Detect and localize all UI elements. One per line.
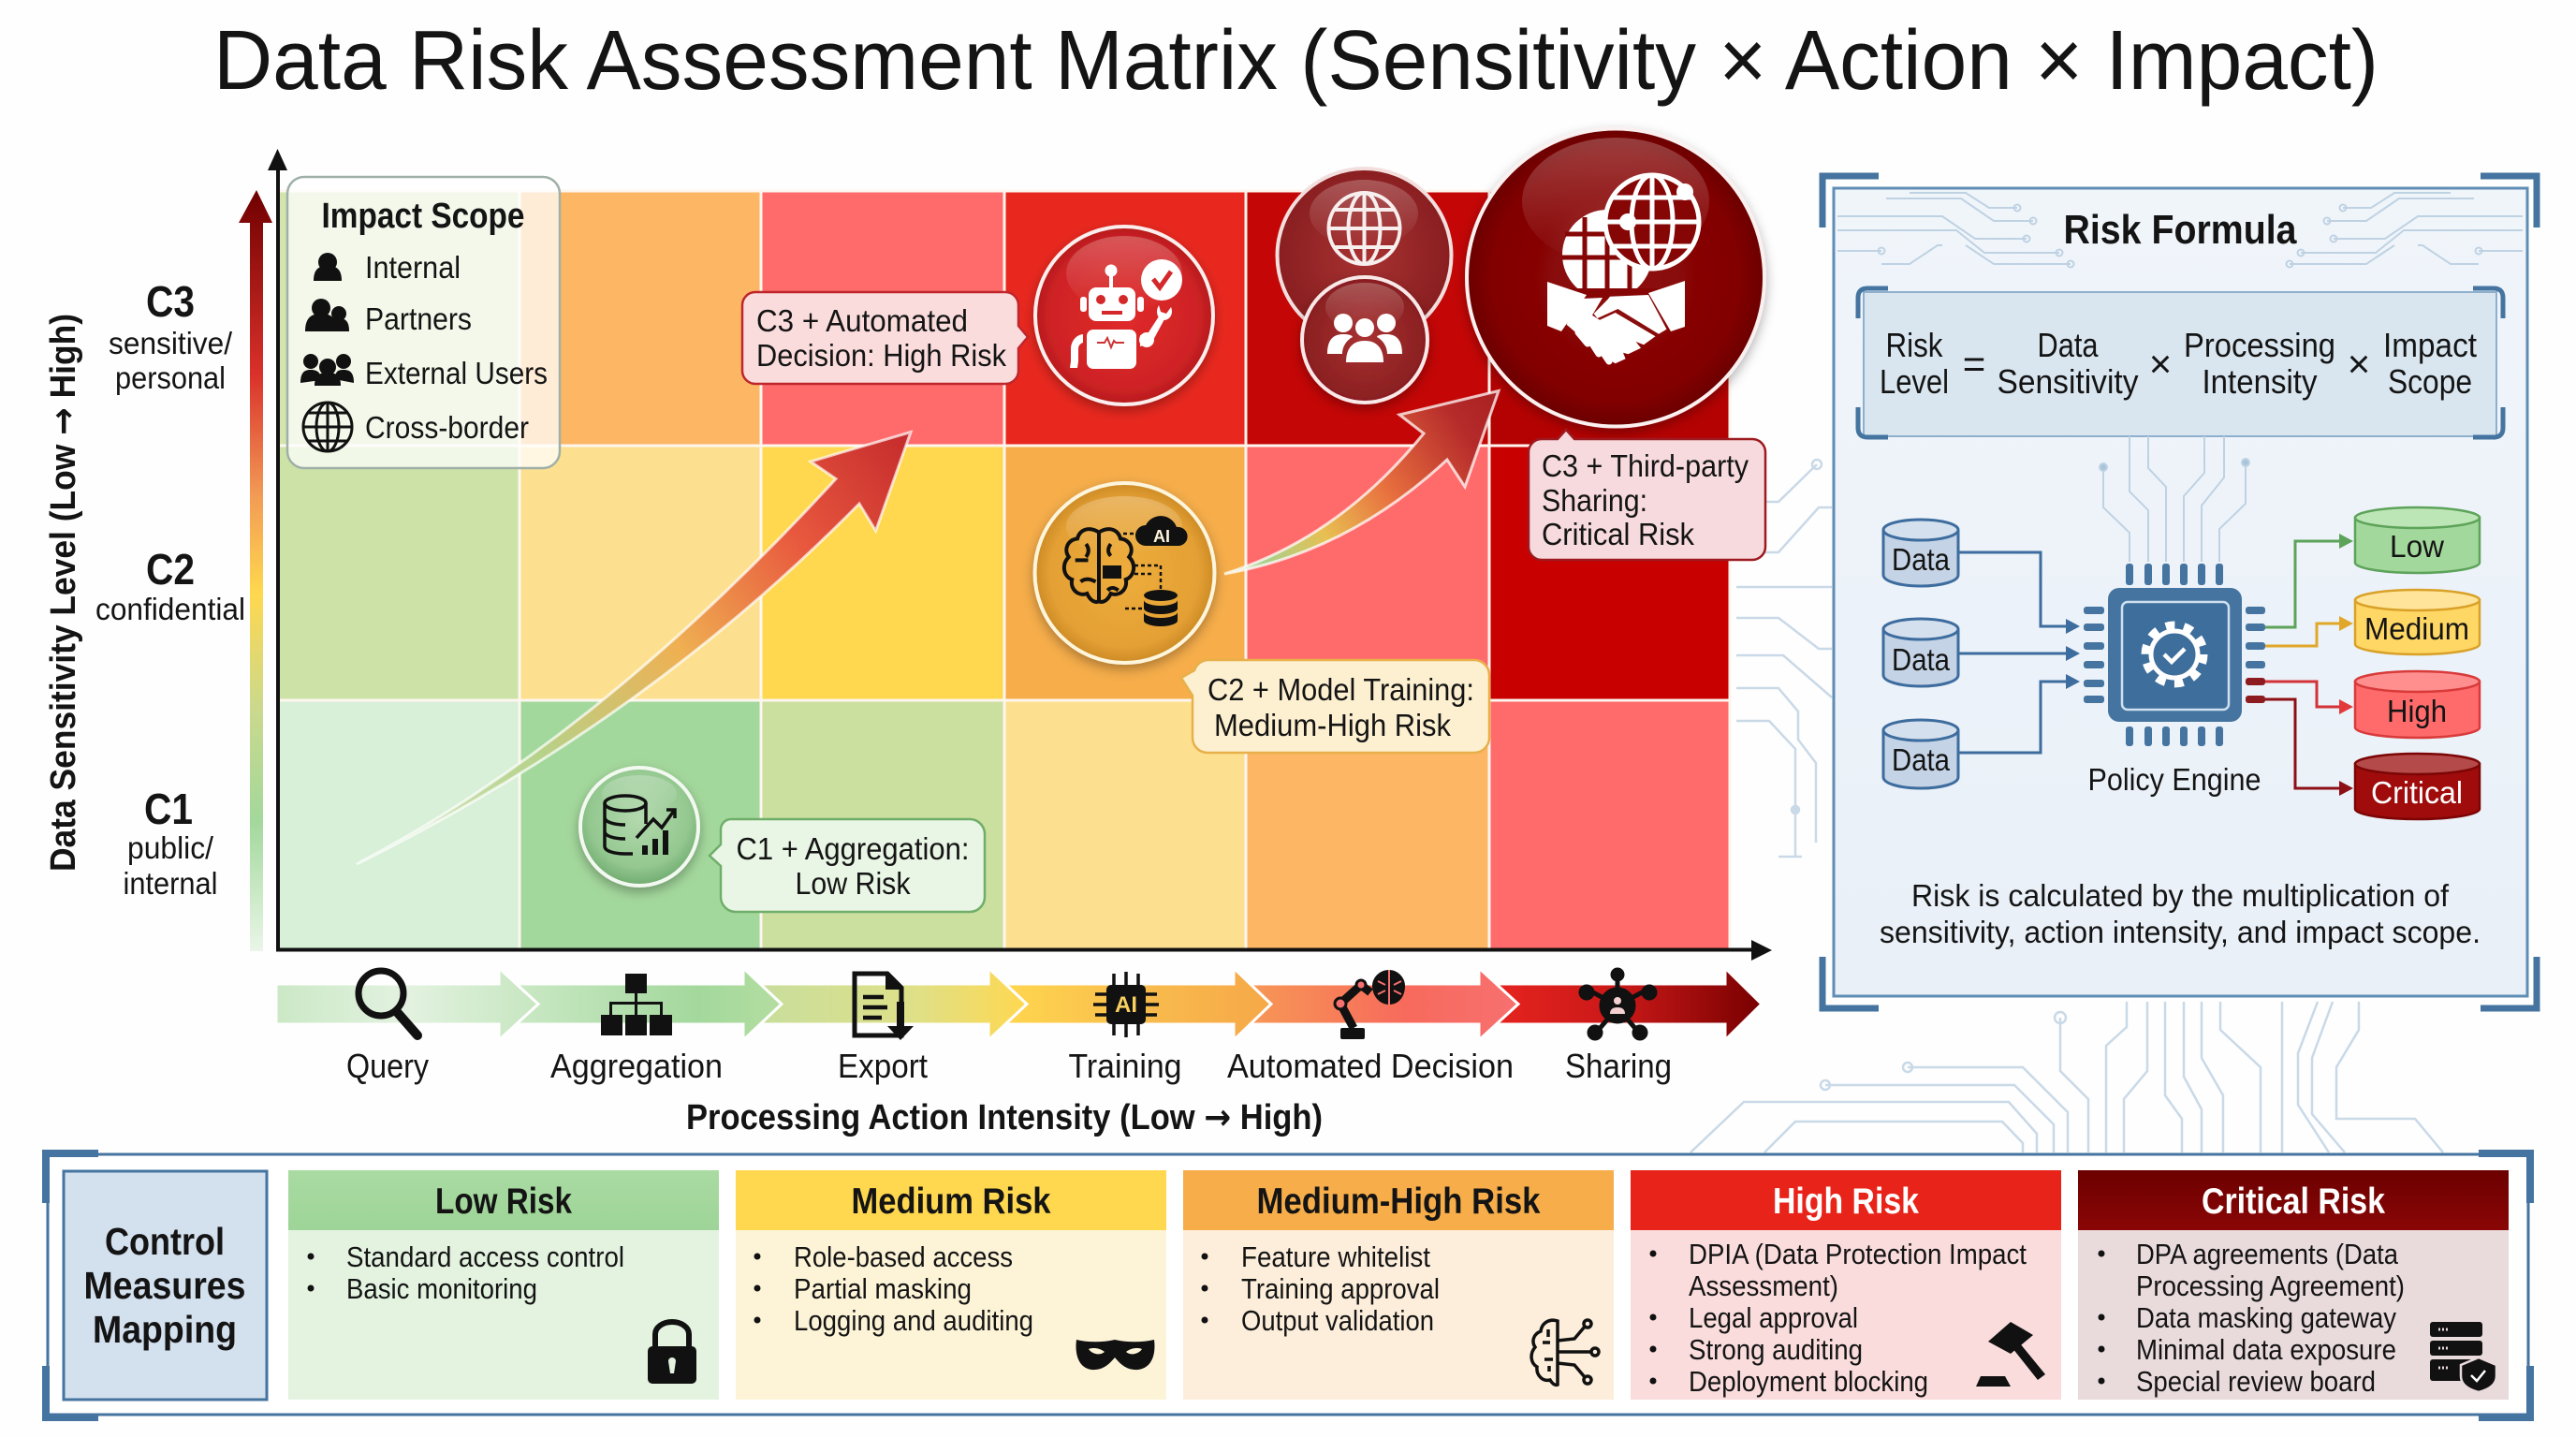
formula caption: sensitivity, action intensity, and impact scope. — [1880, 915, 2481, 949]
y axis labels: C1 — [144, 785, 193, 833]
chip label: Policy Engine — [2087, 762, 2261, 797]
icon: brain with AI and database: AI — [1153, 527, 1170, 546]
data sources — [1883, 520, 1958, 788]
card: low risk: Basic monitoring — [346, 1272, 537, 1305]
callout: C3 + Third-party Sharing: C3 + Third-party — [1542, 448, 1749, 483]
output levels: Medium — [2364, 611, 2469, 646]
arrow: escalation to critical — [1224, 391, 1499, 574]
formula box: Level — [1880, 362, 1949, 401]
icon: aggregation hierarchy — [601, 974, 672, 1035]
card: medium-high risk: Medium-High Risk — [1256, 1181, 1541, 1222]
card: low risk — [288, 1170, 719, 1400]
y axis labels: C3 — [146, 277, 195, 326]
node: C3 cross-border globe — [1277, 169, 1451, 343]
circuit traces into chip — [2100, 436, 2249, 562]
axes — [268, 149, 1772, 961]
card: low risk: Low Risk — [435, 1181, 572, 1222]
node: C3 third-party sharing (critical) — [1467, 129, 1764, 427]
icon: gavel — [1976, 1322, 2045, 1387]
action labels: Export — [838, 1047, 928, 1085]
icon: automated decision robot arm — [1335, 970, 1405, 1039]
icon: training AI chip: AI — [1115, 992, 1137, 1018]
callout: C3 + Third-party Sharing: Sharing: — [1542, 483, 1647, 518]
y axis labels: public/ — [127, 830, 214, 865]
output levels: Low — [2390, 529, 2444, 564]
card: critical risk: DPA agreements (Data — [2136, 1238, 2399, 1270]
legend: impact scope: Partners — [365, 301, 472, 336]
title: Data Risk Assessment Matrix (Sensitivity × Action × Impact) — [213, 14, 2378, 108]
formula box: × — [2149, 342, 2172, 386]
icon: training AI chip — [1093, 972, 1159, 1037]
mapping label box: Control — [105, 1220, 225, 1263]
legend: impact scope: Internal — [365, 250, 461, 285]
x axis title: Processing Action Intensity (Low → High) — [686, 1096, 1323, 1137]
y axis labels: confidential — [95, 592, 245, 626]
card: high risk: Legal approval — [1689, 1301, 1858, 1334]
node: C3 external users — [1302, 277, 1427, 403]
formula box — [1858, 288, 2503, 437]
icon: mask — [1076, 1340, 1154, 1370]
action labels: Training — [1069, 1047, 1181, 1085]
card: medium-high risk: Output validation — [1241, 1304, 1434, 1337]
node: C3 automated decision — [1035, 227, 1213, 404]
card: medium risk: Partial masking — [794, 1272, 972, 1305]
callout: C1 + Aggregation: C1 + Aggregation: — [736, 831, 970, 866]
risk matrix grid — [278, 191, 1730, 949]
callout: C3 + Automated Decision: Decision: High Risk — [756, 338, 1006, 373]
card: low risk: Standard access control — [346, 1240, 624, 1273]
card: critical risk: Minimal data exposure — [2136, 1333, 2396, 1366]
output arrows — [2265, 541, 2342, 788]
output levels: Critical — [2371, 775, 2463, 810]
card: high risk: Deployment blocking — [1689, 1365, 1928, 1398]
card: critical risk: Special review board — [2136, 1365, 2376, 1398]
card: medium-high risk: Feature whitelist — [1241, 1240, 1430, 1273]
callout: C3 + Third-party Sharing: Critical Risk — [1542, 517, 1694, 551]
action labels: Query — [346, 1047, 429, 1085]
callout: C1 + Aggregation — [710, 819, 985, 912]
policy engine chip — [2084, 564, 2265, 746]
y axis labels: internal — [124, 866, 217, 901]
formula box: Data — [2037, 326, 2099, 364]
formula box: Intensity — [2202, 362, 2318, 401]
mapping label box: Measures — [84, 1264, 245, 1307]
data sources: Data — [1892, 642, 1951, 677]
card: high risk: High Risk — [1773, 1181, 1919, 1222]
card: medium risk: Role-based access — [794, 1240, 1013, 1273]
output levels: High — [2387, 694, 2447, 728]
card: high risk: DPIA (Data Protection Impact — [1689, 1238, 2027, 1270]
input arrows — [1958, 552, 2069, 753]
callout: C3 + Third-party Sharing — [1529, 430, 1765, 560]
icon: lock — [648, 1322, 696, 1384]
card: critical risk: Processing Agreement) — [2136, 1269, 2405, 1302]
action labels: Sharing — [1565, 1047, 1672, 1085]
icon: robot with check — [1070, 259, 1182, 369]
panel heading: Risk Formula — [2063, 207, 2297, 253]
formula box: Risk — [1885, 326, 1943, 364]
icon: cross-border globe — [303, 403, 352, 451]
card: medium risk — [736, 1170, 1166, 1400]
action labels: Automated Decision — [1227, 1047, 1514, 1085]
card: high risk: Assessment) — [1689, 1269, 1838, 1302]
panel: risk formula — [1822, 176, 2537, 1008]
card: medium-high risk: Training approval — [1241, 1272, 1440, 1305]
card: medium risk: Medium Risk — [852, 1181, 1051, 1222]
circuit traces behind right panel — [1690, 460, 2443, 1152]
processing action chevron bar — [276, 968, 1762, 1040]
y axis labels: sensitive/ — [109, 326, 233, 360]
action labels: Aggregation — [550, 1047, 723, 1085]
callout: C2 + Model Training: Medium-High Risk — [1214, 708, 1451, 742]
y axis labels: personal — [115, 360, 226, 395]
callout: C2 + Model Training — [1181, 660, 1489, 753]
action labels — [346, 1047, 1672, 1085]
formula box: Impact — [2383, 326, 2477, 364]
callout: C1 + Aggregation: Low Risk — [796, 866, 911, 901]
icon: server with shield — [2430, 1322, 2496, 1392]
card: high risk — [1631, 1170, 2061, 1400]
callout: C3 + Automated Decision: C3 + Automated — [756, 303, 968, 338]
panel: control measures mapping — [46, 1153, 2530, 1417]
data sources: Data — [1892, 742, 1951, 777]
legend heading: Impact Scope — [322, 197, 524, 236]
icon: query magnifier — [359, 971, 417, 1035]
card: critical risk — [2078, 1170, 2509, 1400]
mapping label box: Mapping — [93, 1308, 237, 1351]
formula box: = — [1963, 342, 1985, 386]
icon: sharing network — [1579, 968, 1657, 1040]
card: critical risk: Critical Risk — [2202, 1181, 2385, 1222]
icon: brain with AI and database — [1064, 516, 1188, 626]
icon: people group — [1327, 314, 1402, 362]
node: C1 aggregation — [580, 768, 698, 886]
arrow: low to high risk path — [357, 433, 911, 864]
callout: C3 + Automated Decision — [742, 292, 1028, 384]
icon: export document — [855, 972, 914, 1040]
icon: partners — [305, 299, 349, 331]
icon: brain circuit — [1531, 1320, 1599, 1385]
output levels — [2355, 507, 2480, 819]
legend: impact scope — [287, 177, 560, 468]
card: medium risk: Logging and auditing — [794, 1304, 1033, 1337]
icon: globe — [1329, 193, 1400, 264]
data sources: Data — [1892, 542, 1951, 577]
callout: C2 + Model Training: C2 + Model Training: — [1208, 672, 1474, 707]
icon: internal user — [314, 253, 342, 281]
y axis labels: C2 — [146, 545, 195, 594]
formula box: Sensitivity — [1998, 362, 2138, 401]
icon: handshake under globes — [1547, 173, 1701, 363]
formula caption — [1880, 878, 2481, 949]
formula box: Scope — [2388, 362, 2472, 401]
header circuit decoration — [1837, 193, 2074, 268]
card: medium-high risk — [1183, 1170, 1614, 1400]
icon: external users — [300, 354, 354, 386]
formula box: × — [2348, 342, 2370, 386]
legend: impact scope: External Users — [365, 356, 548, 390]
formula box: Processing — [2184, 326, 2335, 364]
y axis title: Data Sensitivity Level (Low → High) — [42, 314, 83, 872]
mapping label box — [64, 1171, 267, 1400]
y axis labels — [95, 277, 245, 901]
node: C2 model training — [1035, 483, 1215, 663]
sensitivity gradient arrow — [239, 190, 272, 951]
card: high risk: Strong auditing — [1689, 1333, 1863, 1366]
card: critical risk: Data masking gateway — [2136, 1301, 2396, 1334]
icon: database with chart — [605, 796, 675, 855]
legend: impact scope: Cross-border — [365, 410, 529, 445]
formula caption: Risk is calculated by the multiplication of — [1911, 878, 2450, 913]
